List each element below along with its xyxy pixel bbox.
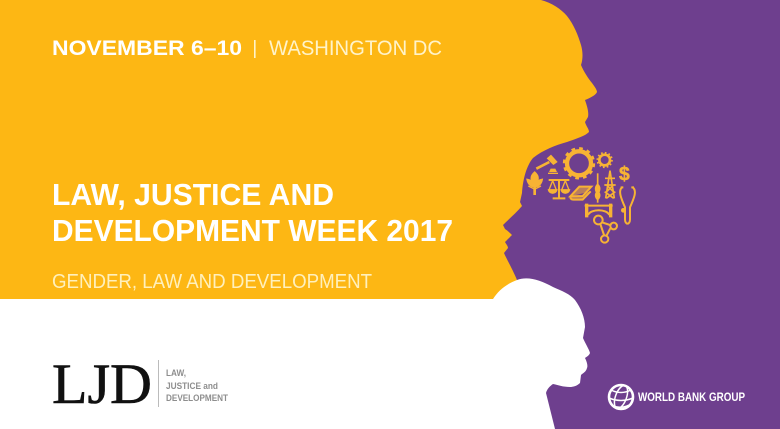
title <box>52 177 453 248</box>
descriptor line 3: DEVELOPMENT <box>166 393 228 404</box>
title line 1: LAW, JUSTICE AND <box>52 177 334 212</box>
icon: stethoscope <box>620 187 635 224</box>
title line 2: DEVELOPMENT WEEK 2017 <box>52 213 453 248</box>
icon: small gear <box>597 153 612 167</box>
LJD wordmark: LJD <box>52 353 152 416</box>
icon: connected nodes <box>594 216 617 243</box>
icon: scales of justice <box>549 180 569 198</box>
silhouette: white child head <box>0 278 590 429</box>
World Bank Group logo <box>609 384 745 410</box>
background: purple panel <box>480 0 780 429</box>
icon: tree <box>527 172 542 195</box>
descriptor line 1: LAW, <box>166 368 186 379</box>
icon: wheat <box>595 173 601 203</box>
icon: book <box>570 187 591 200</box>
icon: dollar sign: $ <box>619 164 630 185</box>
icon: globe <box>609 384 633 410</box>
descriptor line 2: JUSTICE and <box>166 381 218 392</box>
separator <box>254 40 256 58</box>
silhouette: yellow adult faces panel <box>0 0 597 299</box>
date line <box>52 37 442 60</box>
location: WASHINGTON DC <box>269 37 442 60</box>
icon: gavel <box>536 155 558 174</box>
LJD descriptor <box>166 368 228 404</box>
icon: bridge <box>585 204 613 217</box>
LJD divider <box>158 360 159 407</box>
date: NOVEMBER 6–10 <box>52 37 242 60</box>
icon: large gear <box>564 149 594 178</box>
World Bank Group wordmark: WORLD BANK GROUP <box>638 392 745 404</box>
LJD logo <box>52 353 228 416</box>
icon: power pylon <box>604 171 616 198</box>
subtitle: GENDER, LAW AND DEVELOPMENT <box>52 271 372 293</box>
icons inside head <box>527 149 635 243</box>
